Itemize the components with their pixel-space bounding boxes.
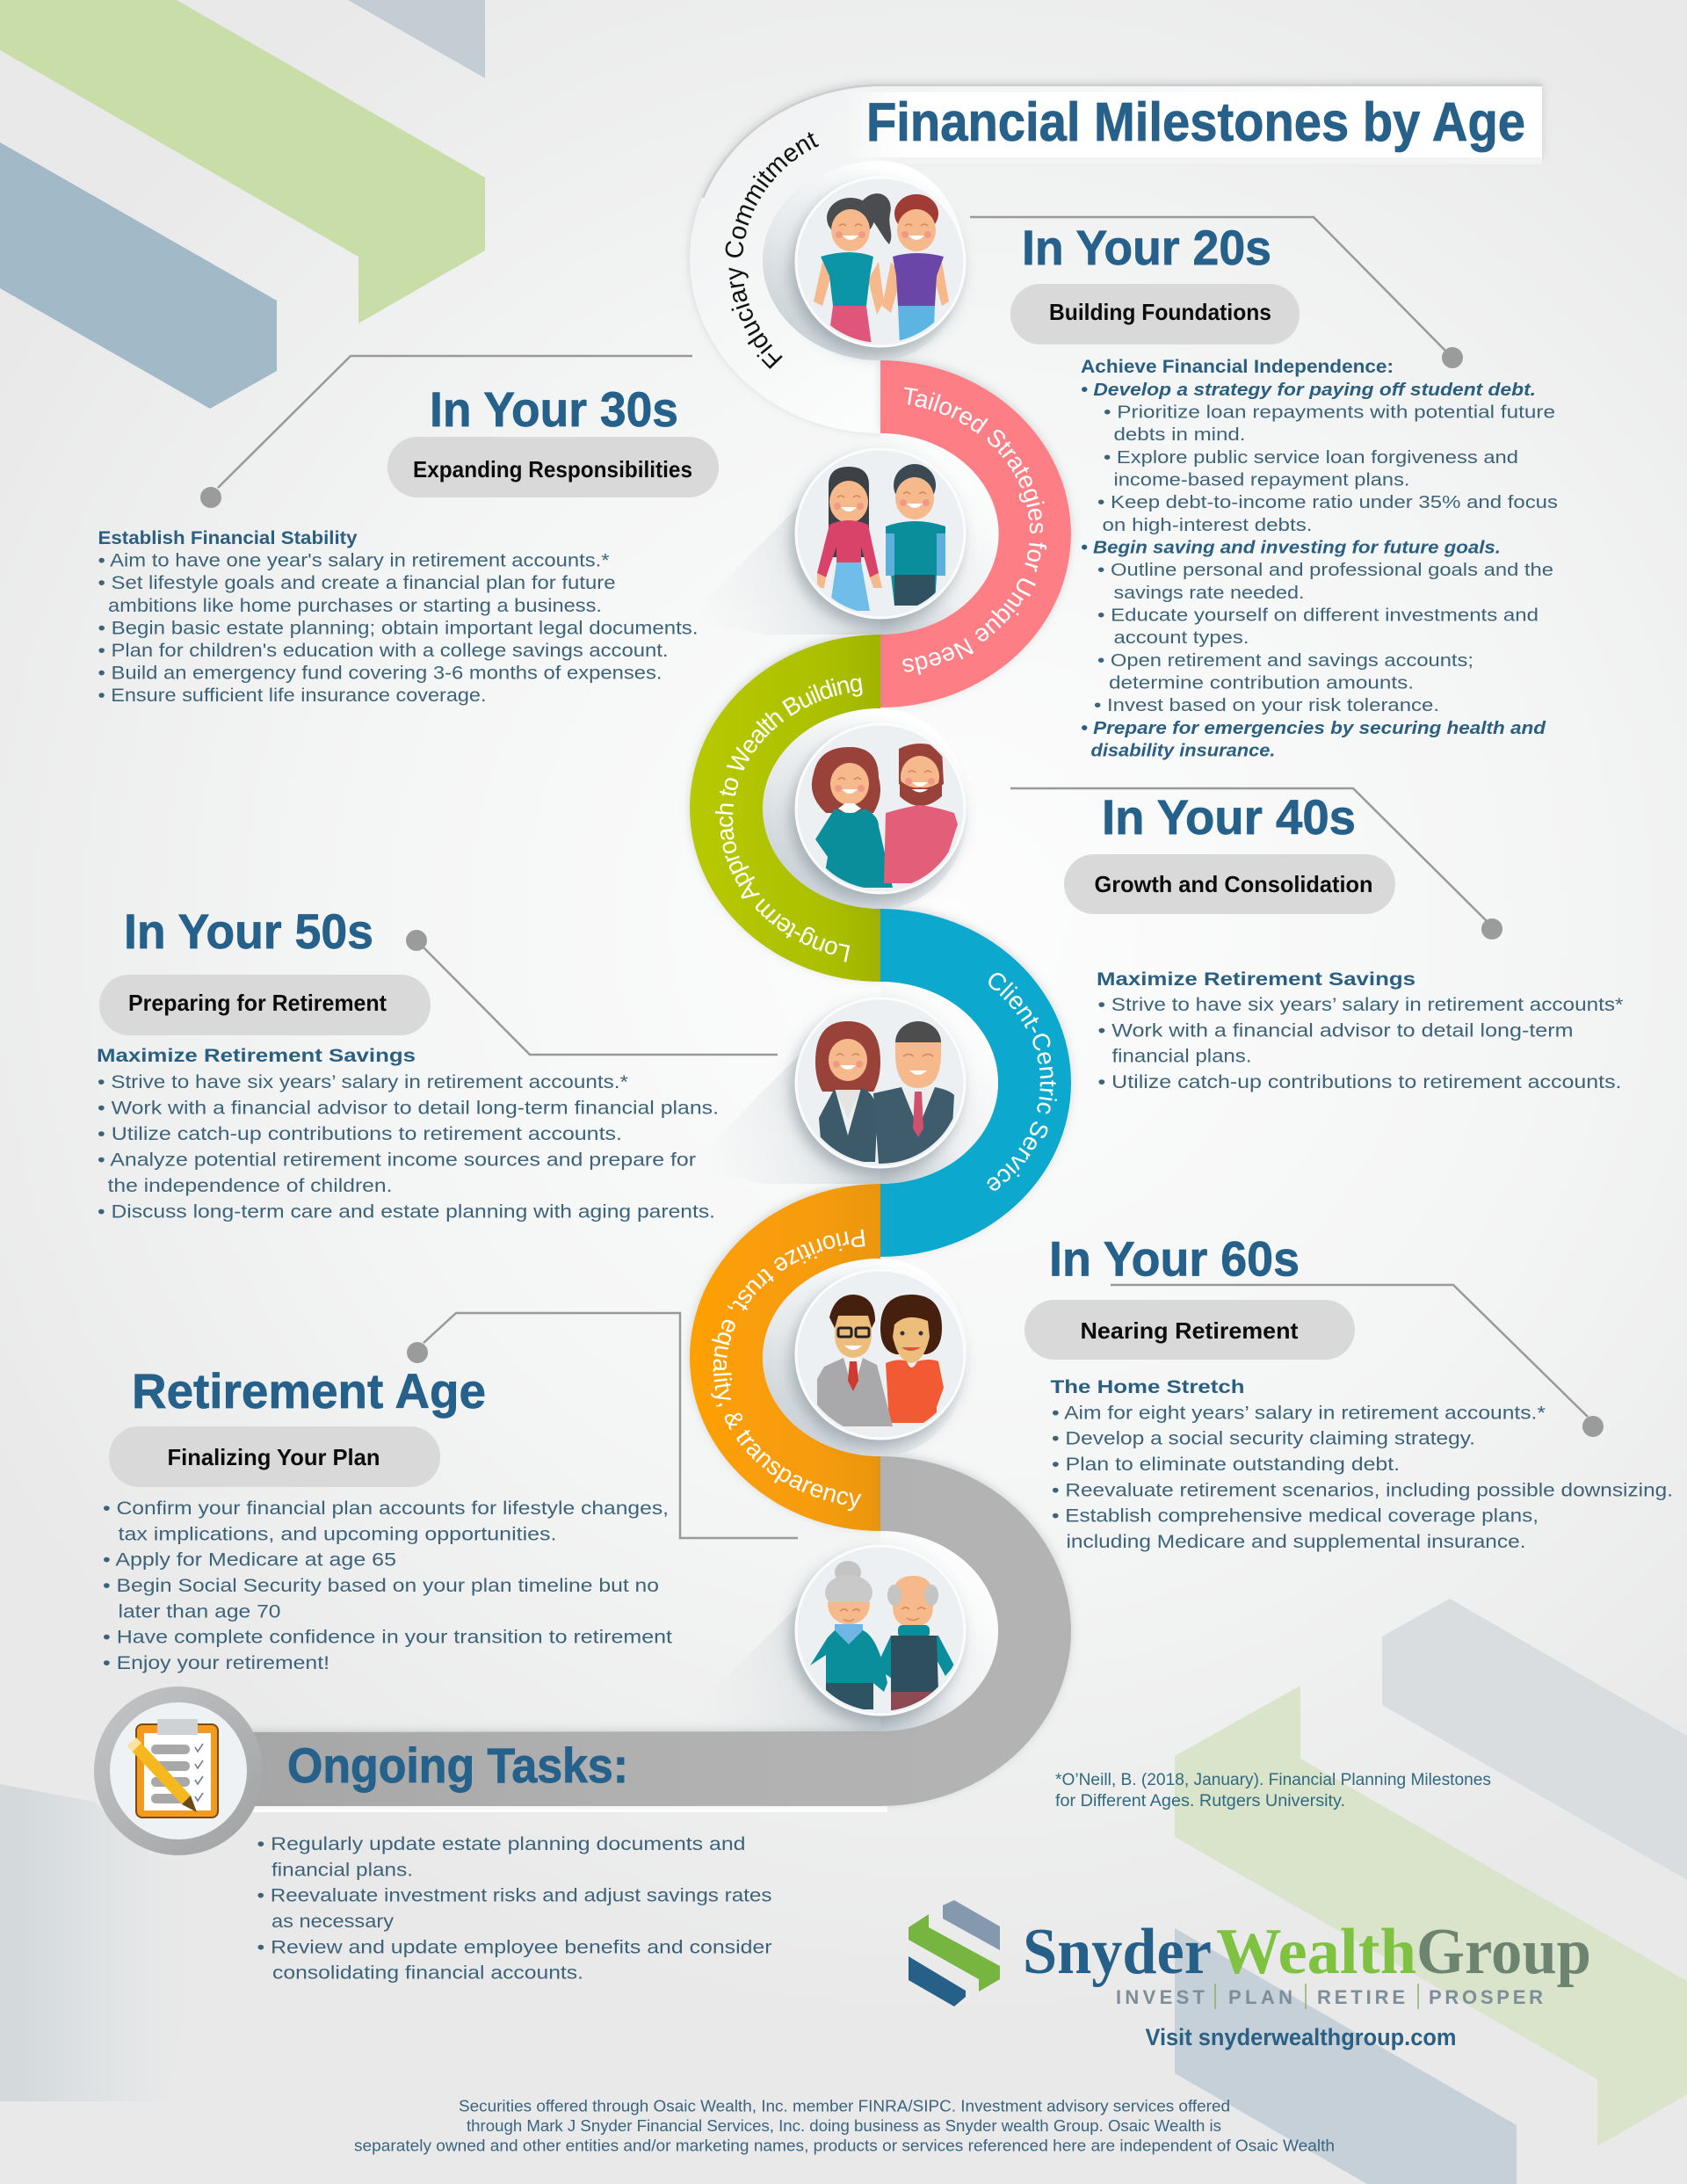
- section: in your 30s: In Your 30s: [430, 381, 678, 437]
- circle: couple in their 20s: [763, 161, 965, 360]
- section: in your 20s: • Develop a strategy for paying off student debt.: [1081, 380, 1536, 400]
- section: in your 40s: • Work with a financial advisor to detail long-term: [1098, 1020, 1573, 1041]
- section: retirement age: Retirement Age: [132, 1363, 486, 1419]
- logo: Snyder Wealth Group: Wealth: [1216, 1916, 1416, 1988]
- connector: 60s: [1111, 1285, 1604, 1437]
- list: ongoing tasks: • Regularly update estate planning documents and: [257, 1834, 745, 1854]
- section: in your 20s: • Open retirement and savings accounts;: [1097, 650, 1473, 671]
- section: in your 50s: Preparing for Retirement: [128, 990, 387, 1016]
- section: in your 20s: disability insurance.: [1091, 740, 1276, 761]
- section: in your 30s: • Ensure sufficient life insurance coverage.: [98, 686, 487, 706]
- section: in your 50s: • Discuss long-term care and estate planning with aging parents.: [98, 1202, 715, 1222]
- section: retirement age: [103, 1363, 672, 1673]
- section: in your 60s: including Medicare and supplemental insurance.: [1067, 1532, 1525, 1552]
- section: in your 60s: In Your 60s: [1049, 1231, 1300, 1287]
- section: in your 30s: • Begin basic estate planning; obtain important legal documents.: [98, 618, 698, 638]
- circle: couple in their 50s: [796, 982, 998, 1184]
- section: in your 60s: The Home Stretch: [1051, 1377, 1244, 1397]
- section: retirement age: • Confirm your financial plan accounts for lifestyle changes,: [103, 1498, 669, 1519]
- band: fiduciary commitment and title ribbon: [687, 79, 1545, 434]
- section: in your 20s: savings rate needed.: [1114, 583, 1304, 603]
- section: in your 20s: • Prioritize loan repayments with potential future: [1104, 403, 1555, 422]
- section: in your 50s: • Work with a financial advisor to detail long-term financial plans.: [98, 1099, 719, 1118]
- section: in your 60s: • Aim for eight years’ salary in retirement accounts.*: [1052, 1403, 1546, 1423]
- heading: ongoing tasks: Ongoing Tasks:: [287, 1738, 628, 1793]
- section: in your 40s: In Your 40s: [1102, 789, 1356, 845]
- section: in your 50s: In Your 50s: [124, 903, 373, 959]
- section: in your 20s: • Outline personal and professional goals and the: [1097, 560, 1553, 580]
- section: in your 60s: [1025, 1231, 1673, 1552]
- curved label: Client-Centric Service: Client-Centric Service: [988, 973, 1057, 1191]
- section: in your 20s: debts in mind.: [1114, 424, 1246, 445]
- section: in your 50s: • Strive to have six years’ salary in retirement accounts.*: [98, 1072, 628, 1092]
- connector: 20s: [970, 217, 1463, 368]
- section: in your 60s: • Develop a social security claiming strategy.: [1052, 1429, 1475, 1449]
- section: in your 30s: Expanding Responsibilities: [413, 456, 692, 483]
- logo: Snyder Wealth Group: PROSPER: [1429, 1986, 1543, 2008]
- logo: Snyder Wealth Group: Group: [1416, 1916, 1591, 1988]
- section: in your 50s: • Analyze potential retirement income sources and prepare for: [98, 1150, 696, 1171]
- footnote: for Different Ages. Rutgers University.: [1055, 1792, 1345, 1810]
- section: in your 40s: Maximize Retirement Savings: [1097, 969, 1415, 990]
- disclaimer: separately owned and other entities and/or marketing names, products or services referenced here are independent of Osaic Wealth: [354, 2137, 1335, 2155]
- section: retirement age: Finalizing Your Plan: [167, 1444, 380, 1470]
- website link: Visit snyderwealthgroup.com: [1146, 2024, 1457, 2050]
- logo: Snyder Wealth Group: [909, 1900, 1591, 2009]
- curved label: Prioritize trust: Prioritize trust, equality, & transparency: [711, 1229, 865, 1512]
- curved label: Tailored Strategies: Tailored Strategies for Unique Needs: [902, 387, 1047, 675]
- logo: Snyder Wealth Group: PLAN: [1228, 1986, 1292, 2008]
- section: in your 20s: • Prepare for emergencies by securing health and: [1081, 718, 1546, 738]
- disclaimer: through Mark J Snyder Financial Services, Inc. doing business as Snyder wealth Group. Osaic Wealth is: [467, 2117, 1221, 2135]
- icon: logo mark: [909, 1900, 1000, 2006]
- list: ongoing tasks: as necessary: [272, 1912, 395, 1932]
- section: in your 20s: account types.: [1114, 628, 1249, 648]
- section: in your 40s: • Strive to have six years’ salary in retirement accounts*: [1098, 995, 1624, 1015]
- icon: clipboard badge: [94, 1687, 263, 1855]
- section: in your 30s: • Set lifestyle goals and create a financial plan for future: [98, 573, 615, 593]
- section: in your 50s: [97, 903, 719, 1222]
- section: in your 30s: • Plan for children's education with a college savings account.: [98, 641, 668, 661]
- section: in your 30s: ambitions like home purchases or starting a business.: [108, 596, 602, 616]
- footnote: [1055, 1771, 1491, 1810]
- band: tailored strategies: [877, 357, 1074, 708]
- section: retirement age: later than age 70: [118, 1601, 281, 1622]
- section: in your 60s: Nearing Retirement: [1081, 1317, 1299, 1344]
- logo: Snyder Wealth Group: RETIRE: [1317, 1986, 1405, 2008]
- disclaimer: [354, 2098, 1335, 2155]
- circle: couple in their 60s: [763, 1259, 968, 1456]
- section: in your 50s: • Utilize catch-up contributions to retirement accounts.: [98, 1124, 622, 1144]
- section: in your 30s: Establish Financial Stability: [98, 528, 358, 548]
- section: in your 60s: • Establish comprehensive medical coverage plans,: [1052, 1506, 1539, 1527]
- circle: couple in their 40s: [763, 708, 968, 909]
- section: in your 60s: • Reevaluate retirement scenarios, including possible downsizing.: [1052, 1480, 1673, 1500]
- band: grey final arc and ongoing bar: [220, 1456, 1071, 1812]
- section: in your 20s: determine contribution amounts.: [1109, 673, 1414, 693]
- logo: Snyder Wealth Group: INVEST: [1116, 1986, 1206, 2008]
- section: in your 20s: • Educate yourself on different investments and: [1097, 605, 1539, 626]
- section: in your 40s: [1064, 789, 1624, 1092]
- list: ongoing tasks: consolidating financial accounts.: [272, 1963, 583, 1984]
- section: retirement age: • Have complete confidence in your transition to retirement: [103, 1628, 672, 1648]
- list: ongoing tasks: [257, 1834, 771, 1984]
- section: in your 30s: • Aim to have one year's salary in retirement accounts.*: [98, 551, 610, 571]
- circle: couple in their 30s: [796, 433, 999, 635]
- section: in your 60s: • Plan to eliminate outstanding debt.: [1052, 1455, 1400, 1475]
- section: in your 50s: the independence of children.: [107, 1176, 392, 1196]
- curved label: Long-term Approach: Long-term Approach to Wealth Building: [715, 678, 863, 962]
- section: in your 20s: • Explore public service loan forgiveness and: [1104, 447, 1518, 468]
- section: in your 20s: income-based repayment plans.: [1114, 469, 1409, 490]
- section: retirement age: • Enjoy your retirement!: [103, 1653, 329, 1673]
- section: in your 40s: Growth and Consolidation: [1095, 871, 1372, 897]
- band: client-centric service: [877, 905, 1075, 1259]
- section: in your 20s: on high-interest debts.: [1102, 515, 1313, 535]
- section: retirement age: • Begin Social Security based on your plan timeline but no: [103, 1576, 659, 1596]
- section: in your 20s: • Keep debt-to-income ratio under 35% and focus: [1097, 492, 1558, 512]
- connector: 40s: [1010, 788, 1502, 940]
- section: in your 20s: • Begin saving and investing for future goals.: [1081, 538, 1501, 557]
- curved label: Fiduciary Commitment: Fiduciary Commitment: [726, 132, 819, 369]
- section: in your 30s: [98, 381, 719, 706]
- section: in your 40s: financial plans.: [1112, 1047, 1251, 1067]
- section: in your 20s: Building Foundations: [1049, 299, 1271, 325]
- section: in your 30s: • Build an emergency fund covering 3-6 months of expenses.: [98, 664, 662, 684]
- title: Financial Milestones by Age: [866, 92, 1525, 153]
- band: prioritize trust: [686, 1180, 884, 1532]
- section: in your 20s: [1010, 220, 1558, 761]
- long shadows beside the circles: [0, 492, 880, 2101]
- disclaimer: Securities offered through Osaic Wealth, Inc. member FINRA/SIPC. Investment advisory services offered: [459, 2098, 1230, 2115]
- section: in your 20s: In Your 20s: [1022, 220, 1271, 275]
- section: retirement age: • Apply for Medicare at age 65: [103, 1550, 396, 1571]
- list: ongoing tasks: • Review and update employee benefits and consider: [257, 1937, 771, 1957]
- logo: Snyder Wealth Group: Snyder: [1023, 1916, 1212, 1988]
- section: in your 20s: Achieve Financial Independence:: [1081, 357, 1394, 377]
- section: in your 50s: Maximize Retirement Savings: [97, 1046, 416, 1066]
- footnote: *O’Neill, B. (2018, January). Financial Planning Milestones: [1055, 1771, 1491, 1789]
- connector: 30s: [200, 356, 692, 508]
- connector: 50s: [406, 930, 778, 1055]
- list: ongoing tasks: • Reevaluate investment risks and adjust savings rates: [257, 1886, 771, 1906]
- section: in your 40s: • Utilize catch-up contributions to retirement accounts.: [1098, 1072, 1622, 1092]
- section: retirement age: tax implications, and upcoming opportunities.: [118, 1524, 557, 1544]
- section: in your 20s: • Invest based on your risk tolerance.: [1094, 695, 1439, 715]
- circle: retired couple: [796, 1531, 998, 1731]
- connector: retirement age: [407, 1313, 798, 1538]
- band: long-term approach: [686, 631, 884, 983]
- list: ongoing tasks: financial plans.: [272, 1860, 413, 1880]
